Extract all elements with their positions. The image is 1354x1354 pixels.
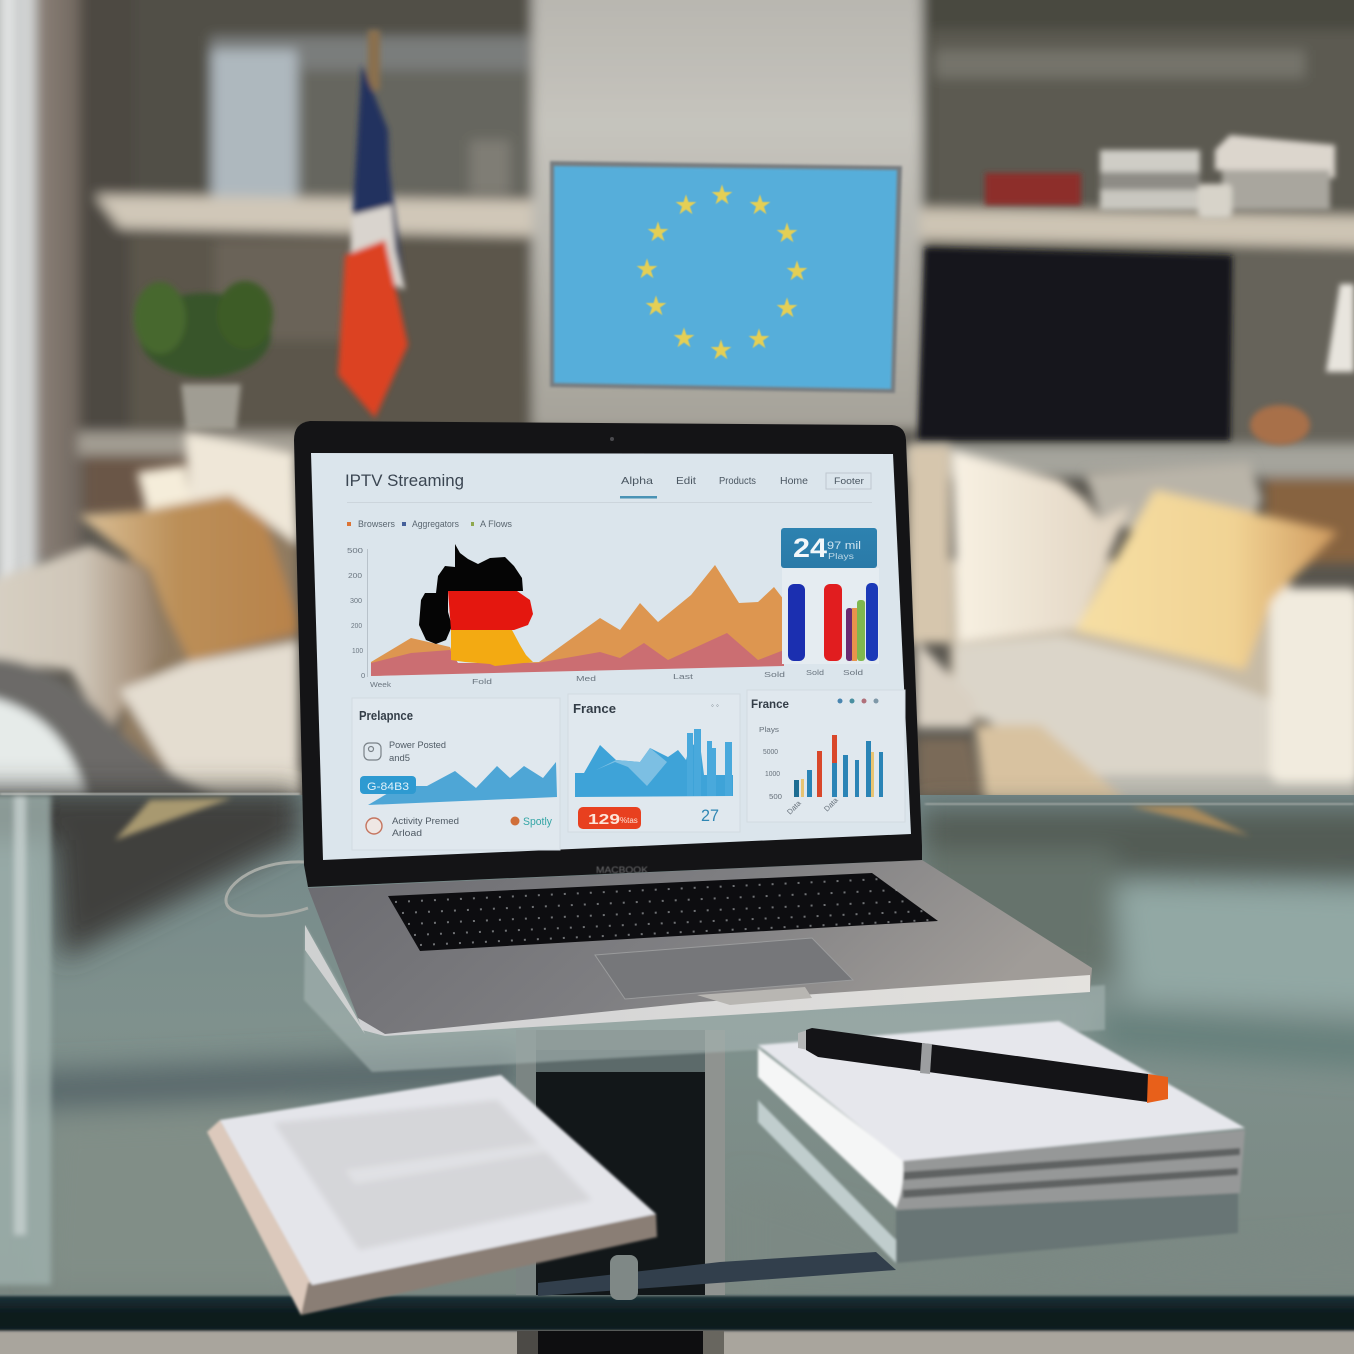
glass front edge bbox=[0, 1296, 1354, 1331]
right shelving bbox=[922, 0, 1354, 480]
axis labels: 1000 bbox=[765, 769, 780, 778]
area chart bbox=[347, 546, 863, 689]
stat card: Plays bbox=[828, 551, 854, 561]
blue badge: G-84B3 bbox=[367, 781, 409, 793]
lamp and bowl bbox=[1250, 284, 1354, 445]
left shelving bbox=[80, 0, 532, 440]
EU stars: ★ bbox=[748, 190, 772, 220]
axis: 300 bbox=[350, 596, 362, 605]
seat cushion bbox=[120, 642, 298, 775]
card heading: France bbox=[573, 702, 616, 716]
axis: Fold bbox=[472, 677, 492, 686]
axis: Week bbox=[370, 680, 391, 689]
lower notebook reflection bbox=[896, 1193, 1238, 1263]
pink series bbox=[371, 633, 784, 676]
hinge bbox=[697, 987, 812, 1005]
stat card: 97 mil bbox=[827, 540, 861, 552]
nav items: Alpha bbox=[621, 475, 653, 487]
lower shelves bbox=[78, 432, 1354, 563]
trackpad bbox=[595, 938, 853, 999]
keyboard bbox=[388, 873, 938, 951]
grey chair bbox=[0, 658, 225, 797]
sofa back column bbox=[908, 445, 950, 643]
red badge: %tas bbox=[620, 816, 638, 825]
dashboard title: IPTV Streaming bbox=[345, 471, 464, 490]
axis: 200 bbox=[348, 571, 362, 580]
EU stars: ★ bbox=[747, 324, 771, 354]
EU stars: ★ bbox=[785, 256, 809, 286]
axis: Med bbox=[576, 674, 596, 683]
EU stars: ★ bbox=[709, 335, 733, 365]
sofa reflections on glass bbox=[115, 798, 1250, 840]
window and curtain bbox=[0, 0, 40, 600]
EU stars: ★ bbox=[635, 254, 659, 284]
EU stars: ★ bbox=[644, 291, 668, 321]
bar panel bbox=[782, 568, 879, 664]
sofa backing bbox=[950, 560, 1290, 720]
axis: 500 bbox=[347, 546, 363, 555]
axis: Sold bbox=[843, 668, 863, 677]
stack front pages bbox=[896, 1130, 1245, 1210]
white spine bbox=[758, 1048, 903, 1208]
sofa arm bbox=[0, 545, 165, 740]
axis labels bbox=[759, 725, 840, 816]
seat bbox=[955, 636, 1306, 782]
table stand bbox=[516, 1030, 896, 1354]
panel: right lower card bbox=[747, 690, 905, 822]
chart legend: Aggregators bbox=[412, 519, 459, 530]
blue badge bbox=[360, 776, 416, 794]
axis labels: Plays bbox=[759, 725, 779, 734]
axis bbox=[347, 546, 863, 689]
orange series bbox=[371, 565, 784, 676]
screen bbox=[311, 453, 911, 860]
icon: flag bbox=[338, 30, 408, 418]
EU flag monitor bbox=[550, 161, 902, 393]
left orange cushion bbox=[78, 495, 298, 662]
laptop brand label: MACBOOK bbox=[596, 865, 648, 875]
left sofa bbox=[0, 432, 300, 797]
notebook text block bbox=[274, 1100, 592, 1250]
metric value: 27 bbox=[701, 806, 719, 825]
axis: Sold bbox=[806, 668, 824, 677]
chart legend: Browsers bbox=[358, 519, 395, 530]
panel: left lower card: and5 bbox=[389, 753, 410, 764]
nav items: Home bbox=[780, 475, 808, 487]
red badge: 129 bbox=[588, 811, 620, 828]
status tag bbox=[510, 816, 552, 828]
wall left bbox=[36, 0, 82, 560]
sofa backing bbox=[118, 520, 298, 797]
pen bbox=[798, 1028, 1168, 1103]
footer label: Activity Premed bbox=[392, 816, 459, 827]
axis labels: Data bbox=[822, 795, 840, 813]
chart legend bbox=[347, 519, 512, 530]
grey back cushion bbox=[1085, 462, 1262, 540]
top cover bbox=[758, 1021, 1245, 1161]
laptop base bbox=[305, 860, 1092, 1036]
EU stars: ★ bbox=[775, 293, 799, 323]
television bbox=[918, 248, 1232, 440]
stat card: 24 bbox=[793, 533, 827, 563]
white back pillows bbox=[137, 432, 298, 545]
axis labels: 500 bbox=[769, 792, 782, 801]
background room bbox=[0, 0, 1354, 800]
panel: middle lower card bbox=[568, 694, 740, 832]
card heading: France bbox=[751, 697, 789, 711]
EU stars bbox=[635, 180, 809, 365]
right sofa bbox=[908, 445, 1354, 807]
grouped bars bbox=[794, 735, 883, 797]
screen lid and bezel bbox=[294, 421, 922, 887]
table top highlight bbox=[0, 793, 300, 795]
EU stars: ★ bbox=[646, 217, 670, 247]
nav items: Footer bbox=[834, 476, 864, 486]
status tag: Spotly bbox=[523, 816, 552, 828]
EU stars: ★ bbox=[775, 218, 799, 248]
icon: plant bbox=[134, 281, 273, 430]
left glass panel edge bbox=[0, 795, 51, 1285]
chart legend: A Flows bbox=[480, 519, 512, 530]
EU stars: ★ bbox=[674, 190, 698, 220]
icon: face bbox=[364, 743, 381, 760]
right shelf board bbox=[920, 208, 1354, 248]
stacked notebooks bbox=[758, 1021, 1245, 1263]
Germany flag map bbox=[419, 544, 533, 666]
card label: Power Posted bbox=[389, 740, 446, 751]
axis labels: Data bbox=[785, 798, 803, 816]
coffee books behind laptop bbox=[975, 725, 1132, 806]
webcam bbox=[610, 437, 614, 441]
dashboard header bbox=[345, 471, 872, 503]
card heading: Prelapnce bbox=[359, 709, 413, 723]
nav items: Edit bbox=[676, 475, 696, 487]
glass table bbox=[0, 790, 1354, 1354]
axis: 0 bbox=[361, 671, 365, 680]
axis: 200 bbox=[351, 621, 362, 630]
legend dots bbox=[838, 698, 878, 704]
icon: smile bbox=[366, 818, 382, 834]
carpet bbox=[0, 1331, 1354, 1354]
right notebooks and pen bbox=[758, 1021, 1245, 1263]
panel: middle lower card: ◦ ◦ bbox=[711, 701, 719, 710]
red badge bbox=[578, 807, 641, 829]
axis labels: 5000 bbox=[763, 747, 778, 756]
laptop glass reflection bbox=[304, 925, 1105, 1072]
cable bbox=[226, 862, 308, 916]
bars bbox=[788, 583, 878, 661]
arm bbox=[1270, 588, 1354, 783]
axis: Last bbox=[673, 672, 694, 681]
nav items: Products bbox=[719, 475, 756, 487]
lower white strip bbox=[758, 1100, 896, 1263]
icon: stacked red books bbox=[985, 135, 1335, 218]
EU stars: ★ bbox=[710, 180, 734, 210]
left notebook bbox=[207, 1075, 657, 1315]
blue area chart bbox=[368, 762, 557, 805]
lower left cream bbox=[916, 640, 975, 728]
left shelf board bbox=[95, 195, 535, 236]
stat card bbox=[781, 528, 877, 568]
laptop bbox=[294, 421, 1092, 1036]
area chart bbox=[575, 729, 733, 797]
nav items bbox=[621, 473, 871, 489]
axis: Sold bbox=[764, 670, 785, 679]
cream cushion bbox=[952, 450, 1130, 642]
right peach cushion bbox=[1075, 490, 1338, 670]
panel: left lower card bbox=[352, 698, 560, 850]
EU stars: ★ bbox=[672, 323, 696, 353]
axis: 100 bbox=[352, 646, 363, 655]
stat panel with bars bbox=[781, 528, 879, 664]
centre column bbox=[532, 0, 922, 430]
panel: left lower card: Arload bbox=[392, 828, 422, 839]
